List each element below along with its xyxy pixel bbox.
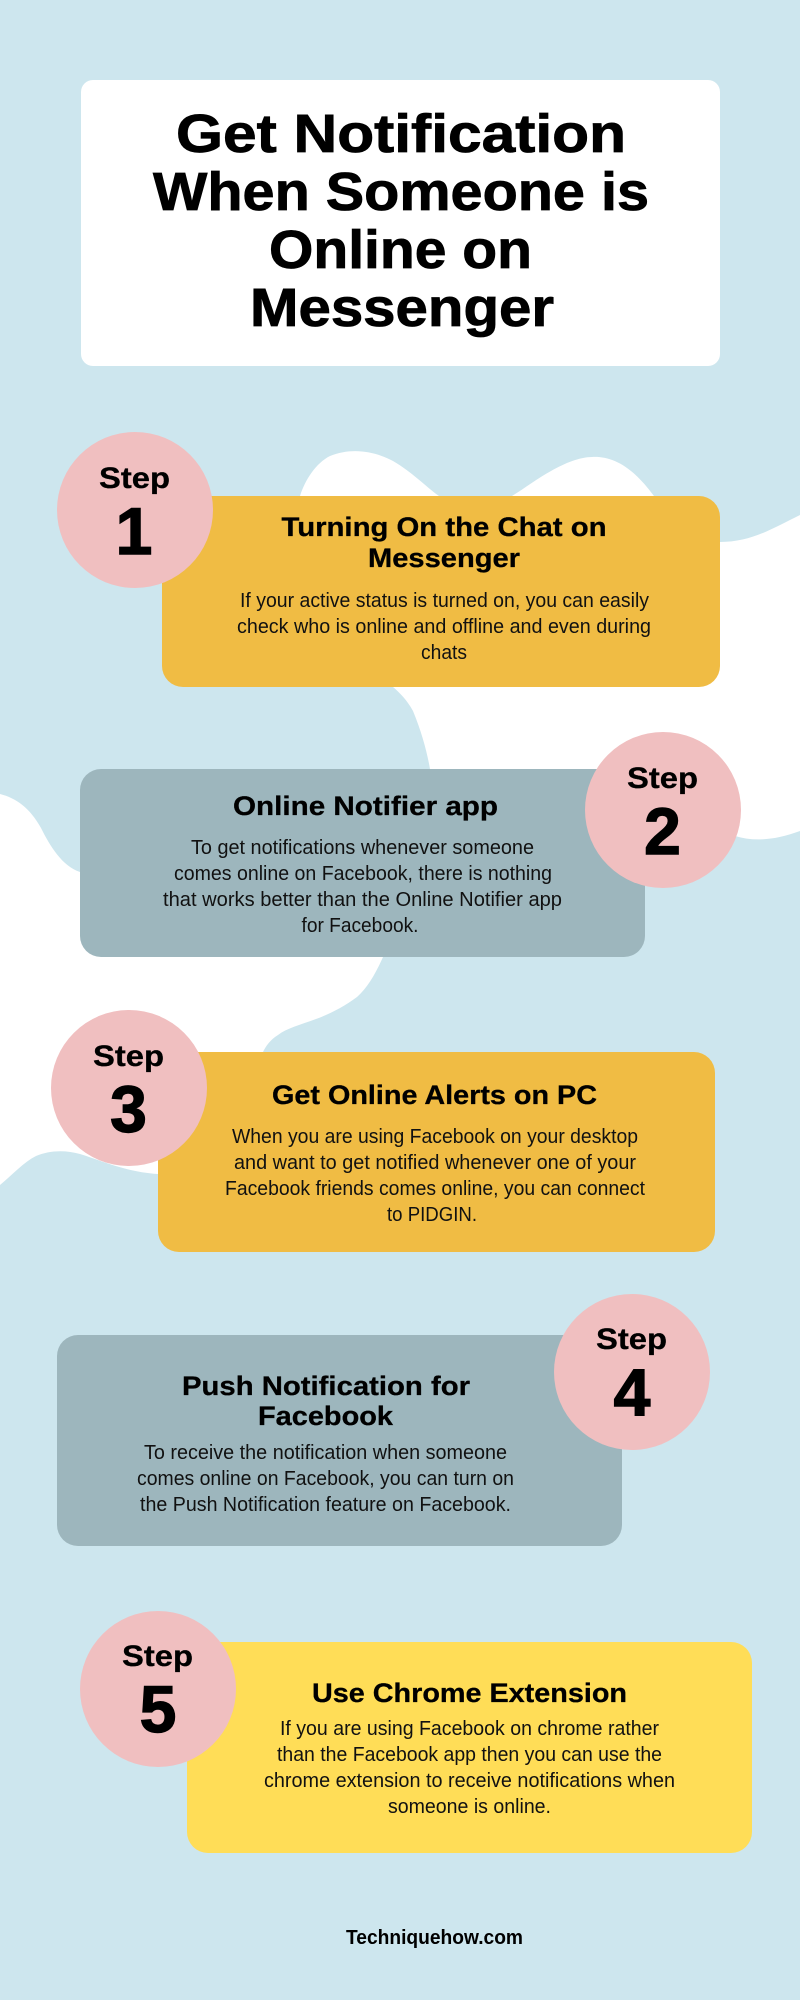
white wavy blob <box>0 451 800 1185</box>
step 4 heading: Push Notification for <box>182 1371 471 1401</box>
step 4 body text <box>137 1442 514 1516</box>
step 3 body text: and want to get notified whenever one of your <box>234 1152 636 1174</box>
title panel <box>81 80 720 366</box>
panel: step 1 <box>57 432 720 687</box>
step 4 body text: the Push Notification feature on Facebook. <box>140 1494 511 1516</box>
step 2 body text <box>163 837 562 937</box>
step 5 body text: If you are using Facebook on chrome rather <box>280 1718 659 1740</box>
step 2 badge <box>585 732 741 888</box>
step 1 heading <box>282 512 606 573</box>
step 1 heading: Turning On the Chat on <box>282 512 606 542</box>
title: Get Notification <box>176 104 626 164</box>
step 2 badge: Step <box>627 762 698 795</box>
step 4 heading <box>182 1371 471 1431</box>
step 5 badge: 5 <box>140 1672 176 1746</box>
step 3 badge <box>51 1010 207 1166</box>
step 4 body text: To receive the notification when someone <box>144 1442 507 1464</box>
step 3 badge: Step <box>93 1040 164 1073</box>
step 1 badge <box>57 432 213 588</box>
step 4 badge <box>554 1294 710 1450</box>
step 3 badge: 3 <box>110 1072 147 1146</box>
step 2 body text: comes online on Facebook, there is nothing <box>174 863 552 885</box>
step 5 body text: chrome extension to receive notifications when <box>264 1770 675 1792</box>
step 3 body text: When you are using Facebook on your desktop <box>232 1126 638 1148</box>
step 2 badge: 2 <box>644 794 681 868</box>
panel: step 2 <box>80 732 741 957</box>
step 2 heading: Online Notifier app <box>233 791 498 821</box>
step 4 badge: 4 <box>614 1355 651 1429</box>
title: When Someone is <box>153 162 649 222</box>
step 5 body text: someone is online. <box>388 1796 551 1818</box>
step 5 heading: Use Chrome Extension <box>312 1678 627 1708</box>
footer credit: Techniquehow.com <box>346 1927 523 1949</box>
panel: step 5 <box>80 1611 752 1853</box>
panel: step 4 <box>57 1294 710 1546</box>
step 5 body text <box>264 1718 675 1818</box>
step 1 badge: 1 <box>116 494 152 568</box>
step 1 body text: If your active status is turned on, you can easily <box>240 590 649 612</box>
step 4 body text: comes online on Facebook, you can turn on <box>137 1468 514 1490</box>
step 3 body text <box>225 1126 645 1226</box>
step 3 body text: to PIDGIN. <box>387 1204 477 1226</box>
title <box>153 104 649 338</box>
step 1 body text: chats <box>421 642 467 664</box>
step 4 heading: Facebook <box>258 1401 394 1431</box>
panel: step 3 <box>51 1010 715 1252</box>
step 4 badge: Step <box>596 1323 667 1356</box>
step 1 heading: Messenger <box>368 543 521 573</box>
step 1 badge: Step <box>99 462 170 495</box>
title: Online on <box>269 220 532 280</box>
step 2 body text: for Facebook. <box>302 915 418 937</box>
step 1 body text: check who is online and offline and even during <box>237 616 651 638</box>
step 5 badge <box>80 1611 236 1767</box>
step 5 body text: than the Facebook app then you can use the <box>277 1744 662 1766</box>
step 5 badge: Step <box>122 1640 193 1673</box>
step 1 body text <box>237 590 651 664</box>
step 2 body text: To get notifications whenever someone <box>191 837 534 859</box>
step 3 body text: Facebook friends comes online, you can connect <box>225 1178 645 1200</box>
title: Messenger <box>250 278 554 338</box>
step 3 heading: Get Online Alerts on PC <box>272 1080 597 1110</box>
step 2 body text: that works better than the Online Notifier app <box>163 889 562 911</box>
